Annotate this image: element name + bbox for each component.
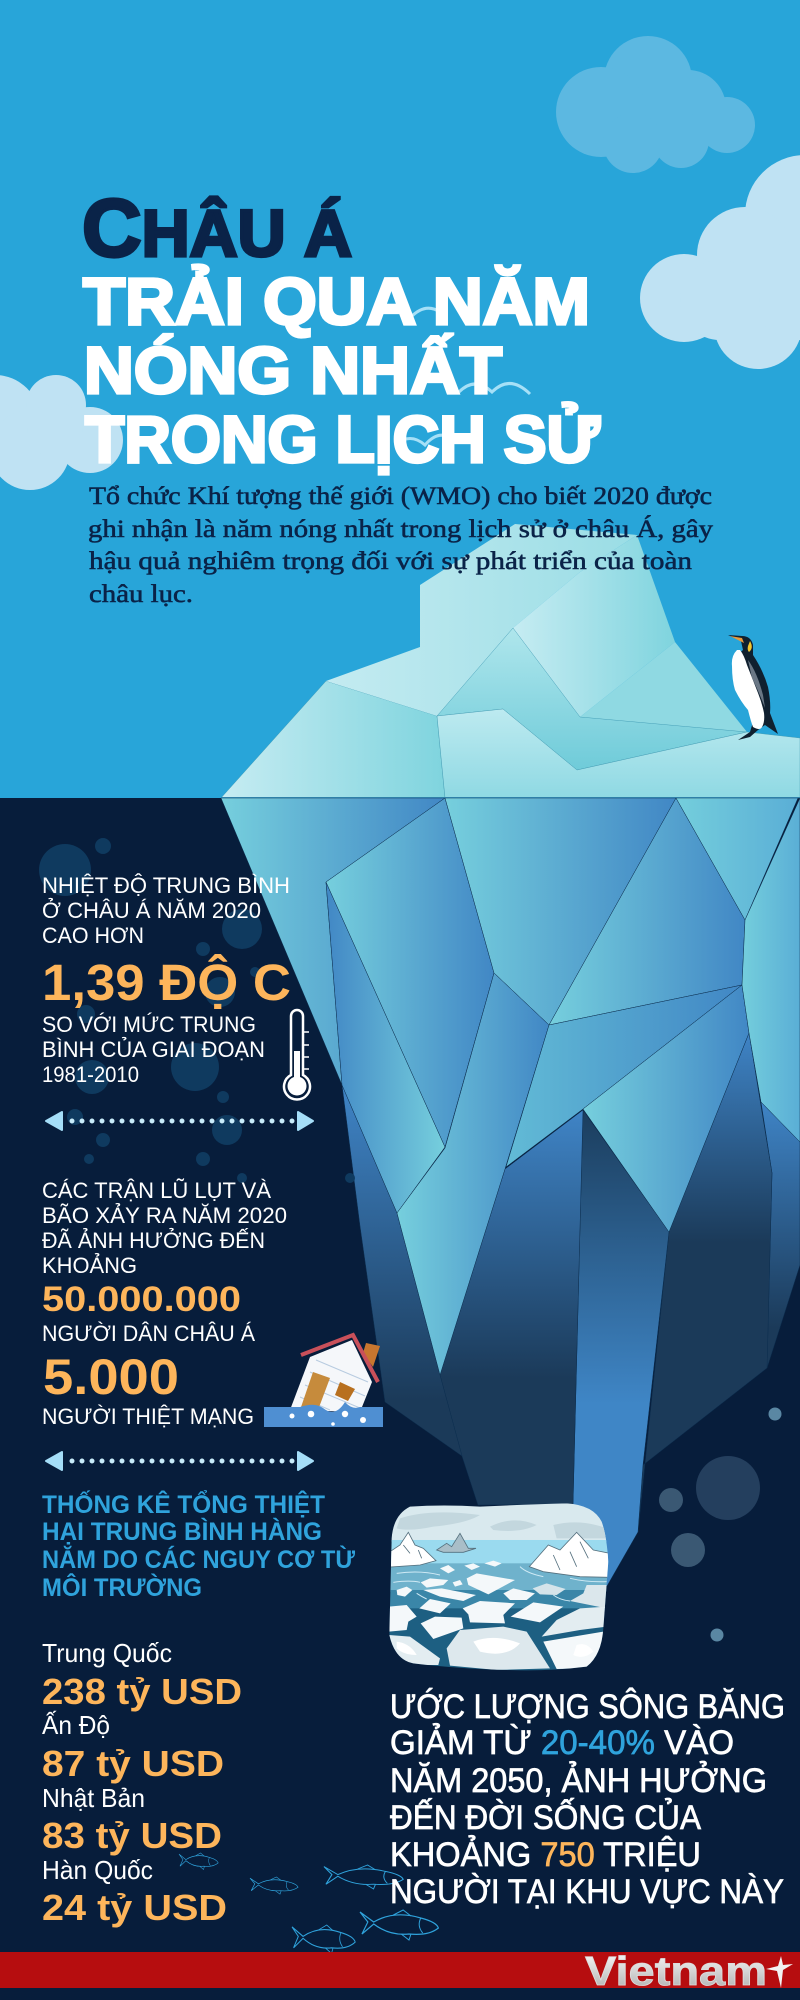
Japan: 83 tỷ USD: [42, 1815, 222, 1856]
title line: Châu Á: CHÂU Á: [82, 183, 352, 274]
facet: left blade: [326, 882, 445, 1213]
iceberg above water: [221, 524, 800, 798]
iceberg: right: [529, 1532, 610, 1577]
South Korea: [42, 1855, 227, 1928]
heading: damage statistics: NĂM DO CÁC NGUY CƠ TỪ: [42, 1544, 355, 1574]
sky background: [0, 0, 800, 798]
stat block: floods: [42, 1178, 287, 1429]
stat block: floods: ĐÃ ẢNH HƯỞNG ĐẾN: [42, 1228, 265, 1253]
heading: damage statistics: MÔI TRƯỜNG: [42, 1572, 202, 1602]
cloud: top right: [556, 36, 755, 173]
title line: Nóng nhất: NÓNG NHẤT: [84, 333, 502, 407]
India: Ấn Độ: [42, 1710, 110, 1740]
background bubbles: right: [659, 1408, 782, 1642]
deep facet: centre column: [570, 1110, 669, 1600]
title line: Trong lịch sử: TRONG LỊCH SỬ: [85, 402, 600, 476]
icon: penguin: [728, 635, 778, 740]
South Korea: Hàn Quốc: [42, 1855, 153, 1885]
illustration: melting sea ice: [389, 1503, 608, 1670]
fish school: [179, 1853, 438, 1954]
big number: 50.000.000: 50.000.000: [42, 1280, 241, 1319]
ocean background: [0, 798, 800, 2000]
divider arrow 1: [46, 1112, 313, 1130]
big number: 1,39 độ C: 1,39 ĐỘ C: [42, 953, 291, 1011]
facet: upper right: [513, 535, 675, 717]
stat block: floods: BÃO XẢY RA NĂM 2020: [42, 1203, 287, 1228]
facet: top centre: [445, 798, 676, 1025]
stat block: floods: KHOẢNG: [42, 1253, 137, 1278]
birds: [395, 308, 530, 445]
glacier statement: GIẢM TỪ 20-40% VÀO: [390, 1724, 734, 1762]
stat block: temperature: [42, 873, 291, 1087]
deep facet: far right: [761, 1102, 800, 1368]
facet: middle: [437, 628, 747, 770]
facet: left: [221, 681, 445, 798]
waterline: [221, 796, 800, 798]
glacier statement: ĐẾN ĐỜI SỐNG CỦA: [390, 1798, 701, 1837]
facet: top left: [221, 798, 445, 1085]
stat block: temperature: Ở CHÂU Á NĂM 2020: [42, 898, 261, 923]
stat block: floods: CÁC TRẬN LŨ LỤT VÀ: [42, 1178, 271, 1203]
India: 87 tỷ USD: [42, 1743, 224, 1784]
footer bar: [0, 1952, 800, 1988]
facet: foreground shelf: [437, 709, 800, 798]
facet: top right-centre: [549, 798, 745, 1025]
stat block: temperature: 1981-2010: [42, 1062, 139, 1087]
China: [42, 1638, 242, 1712]
facet: lower middle: [506, 985, 742, 1167]
South Korea: 24 tỷ USD: [42, 1887, 227, 1928]
big number: 5.000: 5.000: [43, 1349, 179, 1405]
facet: lower spike: [397, 973, 549, 1375]
cloud: right: [640, 155, 800, 369]
title: [82, 183, 600, 476]
facet: left centre: [326, 798, 494, 1147]
stat block: floods: NGƯỜI THIỆT MẠNG: [42, 1404, 254, 1429]
stat block: temperature: NHIỆT ĐỘ TRUNG BÌNH: [42, 873, 290, 898]
heading: damage statistics: HẠI TRUNG BÌNH HÀNG: [42, 1517, 322, 1546]
cloud: left: [0, 375, 123, 490]
India: [42, 1710, 224, 1784]
deep facet: right: [638, 1033, 772, 1532]
glacier statement: KHOẢNG 750 TRIỆU: [390, 1836, 701, 1874]
divider arrow 2: [46, 1452, 313, 1470]
heading: damage statistics: THỐNG KÊ TỔNG THIỆT: [42, 1489, 325, 1519]
intro paragraph: ghi nhận là năm nóng nhất trong lịch sử ở châu Á, gây: [88, 515, 714, 543]
heading: damage statistics: [42, 1489, 355, 1602]
intro paragraph: [88, 483, 714, 608]
stat block: temperature: SO VỚI MỨC TRUNG: [42, 1012, 256, 1037]
icon: flooded house: [264, 1335, 383, 1427]
title line: Trải qua năm: TRẢI QUA NĂM: [83, 264, 590, 338]
facet: right slope: [580, 642, 747, 732]
intro paragraph: hậu quả nghiêm trọng đối với sự phát triển của toàn: [89, 548, 693, 575]
damage list by country: [42, 1638, 242, 1928]
iceberg below water: [221, 798, 800, 1600]
glacier statement: NĂM 2050, ẢNH HƯỞNG: [390, 1762, 767, 1800]
iceberg: left: [390, 1532, 436, 1567]
icon: thermometer: [284, 1010, 310, 1100]
stat block: temperature: BÌNH CỦA GIAI ĐOẠN: [42, 1037, 265, 1062]
intro paragraph: Tổ chức Khí tượng thế giới (WMO) cho biết 2020 được: [89, 483, 712, 510]
facet: upper left: [326, 524, 637, 716]
intro paragraph: châu lục.: [89, 581, 193, 608]
deep facet: left: [342, 1085, 462, 1456]
China: 238 tỷ USD: [42, 1671, 242, 1712]
China: Trung Quốc: [42, 1638, 172, 1668]
Japan: Nhật Bản: [42, 1783, 145, 1813]
iceberg: middle: [437, 1533, 476, 1552]
glacier statement: [390, 1688, 785, 1911]
Japan: [42, 1783, 222, 1856]
stat block: temperature: CAO HƠN: [42, 923, 144, 948]
stat block: floods: NGƯỜI DÂN CHÂU Á: [42, 1321, 255, 1346]
deep facet: centre: [440, 1110, 583, 1505]
facet: far right: [742, 798, 800, 1142]
logo: Vietnam+: Vietnam: [585, 1948, 767, 1994]
background bubbles: left: [39, 838, 355, 1183]
facet: lower right spike: [583, 985, 749, 1232]
facet: top right: [676, 798, 798, 920]
